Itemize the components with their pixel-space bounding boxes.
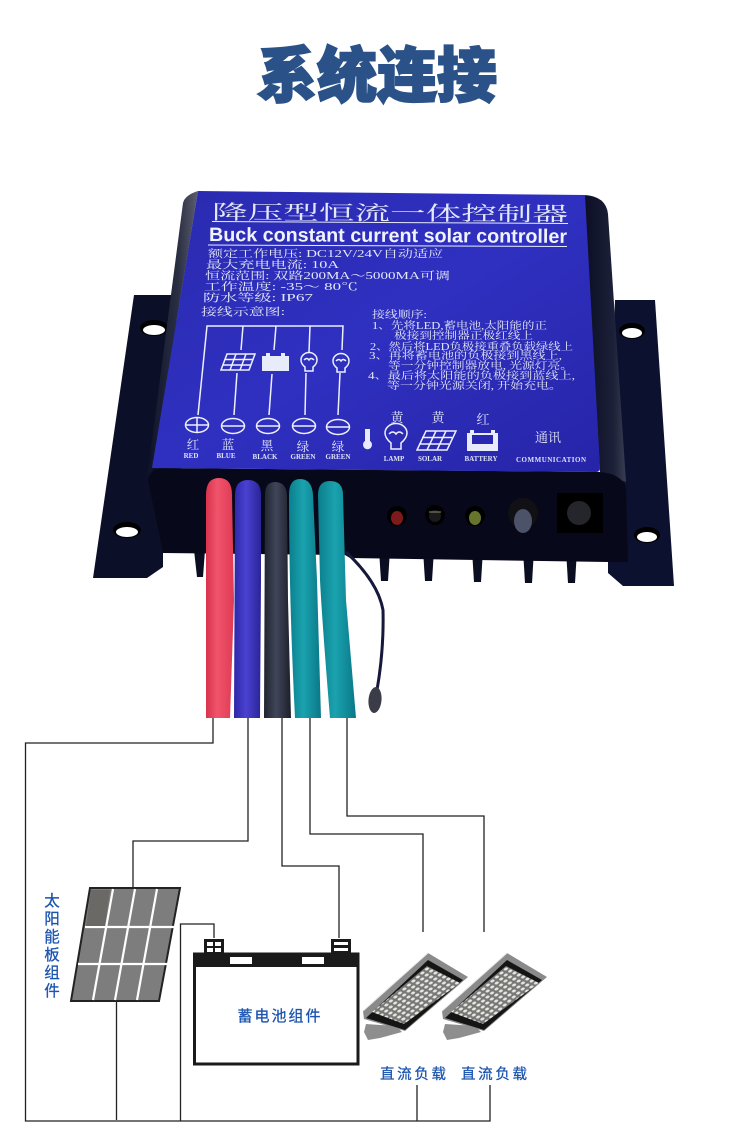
wire english labels: RED [184, 452, 198, 460]
wiring order instructions: 极接到控制器正极红线上 [394, 329, 533, 342]
indicator colour labels: 黄 [431, 410, 445, 425]
wire colour labels: 红 [187, 438, 200, 452]
controller front face [148, 468, 628, 562]
wire colour labels: 黑 [261, 439, 274, 453]
battery icon [467, 430, 498, 451]
specification text: 最大充电电流: 10A [206, 258, 340, 271]
solar panel label: 太 [44, 892, 60, 910]
wire english labels: BLUE [216, 452, 236, 460]
controller photo [93, 191, 674, 718]
terminal symbols [185, 418, 350, 434]
schematic solar icon [221, 354, 255, 370]
thermistor probe wire [346, 552, 383, 714]
solar panel label: 板 [44, 946, 60, 964]
thermometer icon [363, 429, 372, 449]
wiring order instructions: 1、先将LED,蓄电池,太阳能的正 [372, 319, 547, 332]
wiring order instructions: 2、然后将LED负极接重叠负载绿线上 [370, 340, 573, 353]
solar panel label: 阳 [44, 910, 60, 928]
teal wire one [289, 479, 321, 718]
solar panel label [44, 892, 60, 1000]
blue label panel [152, 191, 600, 472]
specification text: 防水等级: IP67 [203, 291, 313, 304]
wire english labels: BLACK [253, 453, 278, 461]
wire english labels: GREEN [326, 453, 350, 461]
wire colour labels: 绿 [332, 440, 345, 454]
wiring schematic [184, 326, 350, 461]
solar panel [71, 888, 180, 1001]
specification text: 接线示意图: [201, 305, 285, 318]
battery [193, 939, 359, 1064]
wiring order instructions: 3、再将蓄电池的负极接到黑线上, [369, 349, 562, 362]
solar panel label: 组 [44, 964, 60, 982]
right mounting flange [608, 300, 674, 586]
teal wire two [318, 481, 356, 718]
wire colour labels: 绿 [297, 440, 310, 454]
schematic battery icon [262, 353, 289, 371]
street lamp two [442, 953, 547, 1040]
heat sink fins [194, 550, 577, 583]
wire english labels: GREEN [291, 453, 315, 461]
wire english labels [184, 452, 350, 461]
indicator english labels: COMMUNICATION [516, 456, 586, 464]
lamp icon [385, 424, 407, 449]
dc load label two: 直流负载 [461, 1066, 527, 1083]
title: 系统连接 [257, 43, 497, 110]
street lamp one [363, 953, 468, 1040]
indicator english labels: LAMP [384, 455, 405, 463]
indicator english labels [384, 455, 586, 464]
specification text: 额定工作电压: DC12V/24V自动适应 [208, 247, 444, 260]
solar panel label: 能 [44, 928, 60, 946]
solar panel label: 件 [44, 982, 60, 1000]
indicator colour labels [390, 410, 561, 445]
heading underlines [208, 222, 568, 246]
schematic bulb icons [301, 353, 349, 372]
specification text [201, 247, 450, 318]
indicator english labels: BATTERY [464, 455, 498, 463]
specification text: 工作温度: -35～ 80℃ [204, 280, 358, 293]
left mounting flange [93, 295, 190, 578]
indicator colour labels: 黄 [390, 410, 404, 425]
blue wire [234, 480, 261, 718]
indicator LEDs [387, 493, 603, 533]
indicator english labels: SOLAR [418, 455, 443, 463]
connection lines [26, 718, 490, 1121]
indicator colour labels: 红 [476, 412, 490, 427]
wiring order instructions: 等一分钟光源关闭, 开始充电。 [387, 379, 562, 392]
wiring order instructions: 4、最后将太阳能的负极接到蓝线上, [368, 369, 575, 382]
indicator colour labels: 通讯 [535, 430, 561, 445]
wire colour labels: 蓝 [222, 437, 234, 452]
black wire [264, 482, 291, 718]
battery label: 蓄电池组件 [237, 1008, 323, 1025]
dc load label one: 直流负载 [380, 1066, 446, 1083]
controller side walls [147, 191, 626, 482]
solar icon [417, 431, 456, 450]
wire colour labels [187, 437, 345, 454]
wiring order instructions: 等一分钟控制器放电, 光源灯亮。 [388, 359, 573, 372]
panel heading chinese: 降压型恒流一体控制器 [212, 201, 568, 226]
red wire [206, 478, 234, 718]
wiring order instructions [368, 308, 575, 392]
wiring order instructions: 接线顺序: [372, 308, 427, 321]
indicator legend [363, 410, 586, 464]
panel heading english: Buck constant current solar controller [209, 224, 567, 248]
specification text: 恒流范围: 双路200MA～5000MA可调 [205, 269, 450, 282]
